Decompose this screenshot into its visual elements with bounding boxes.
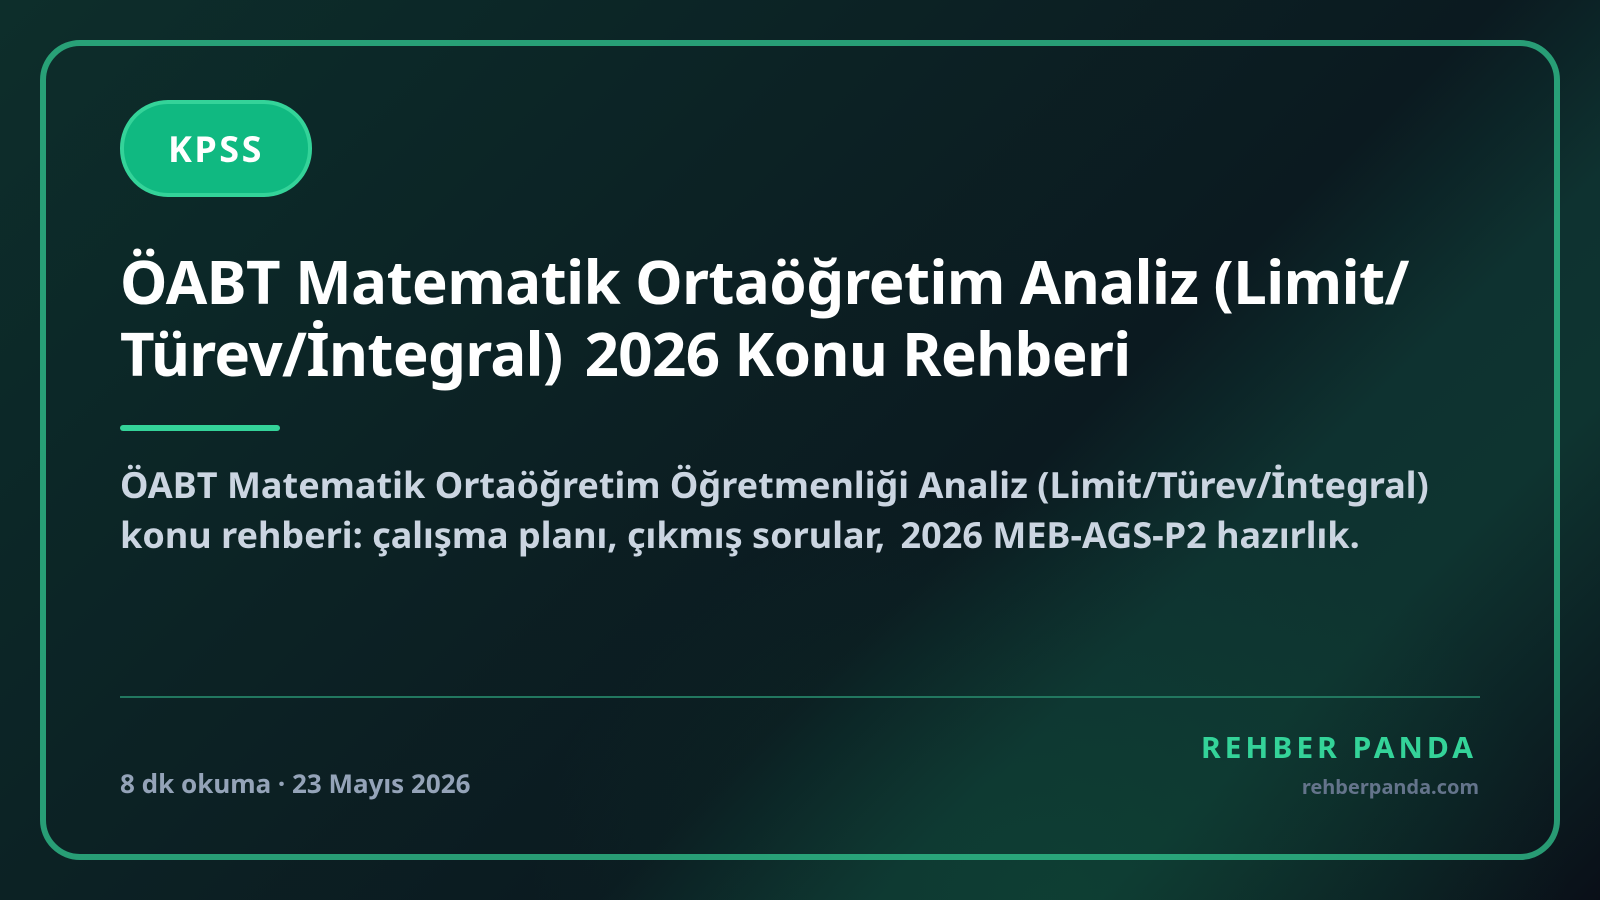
footer divider	[120, 696, 1480, 698]
reading time and date: 8 dk okuma · 23 Mayıs 2026	[120, 765, 470, 801]
website: rehberpanda.com	[1302, 773, 1479, 800]
title	[120, 240, 1410, 394]
description	[120, 460, 1429, 559]
brand name: REHBER PANDA	[1201, 726, 1477, 767]
description: konu rehberi: çalışma planı, çıkmış sorular, 2026 MEB-AGS-P2 hazırlık.	[120, 510, 1360, 559]
category badge	[120, 100, 312, 197]
title: ÖABT Matematik Ortaöğretim Analiz (Limit/	[120, 240, 1409, 322]
title: Türev/İntegral) 2026 Konu Rehberi	[120, 312, 1131, 394]
description: ÖABT Matematik Ortaöğretim Öğretmenliği Analiz (Limit/Türev/İntegral)	[120, 460, 1429, 509]
accent bar	[120, 425, 280, 431]
category badge: KPSS	[168, 124, 264, 173]
